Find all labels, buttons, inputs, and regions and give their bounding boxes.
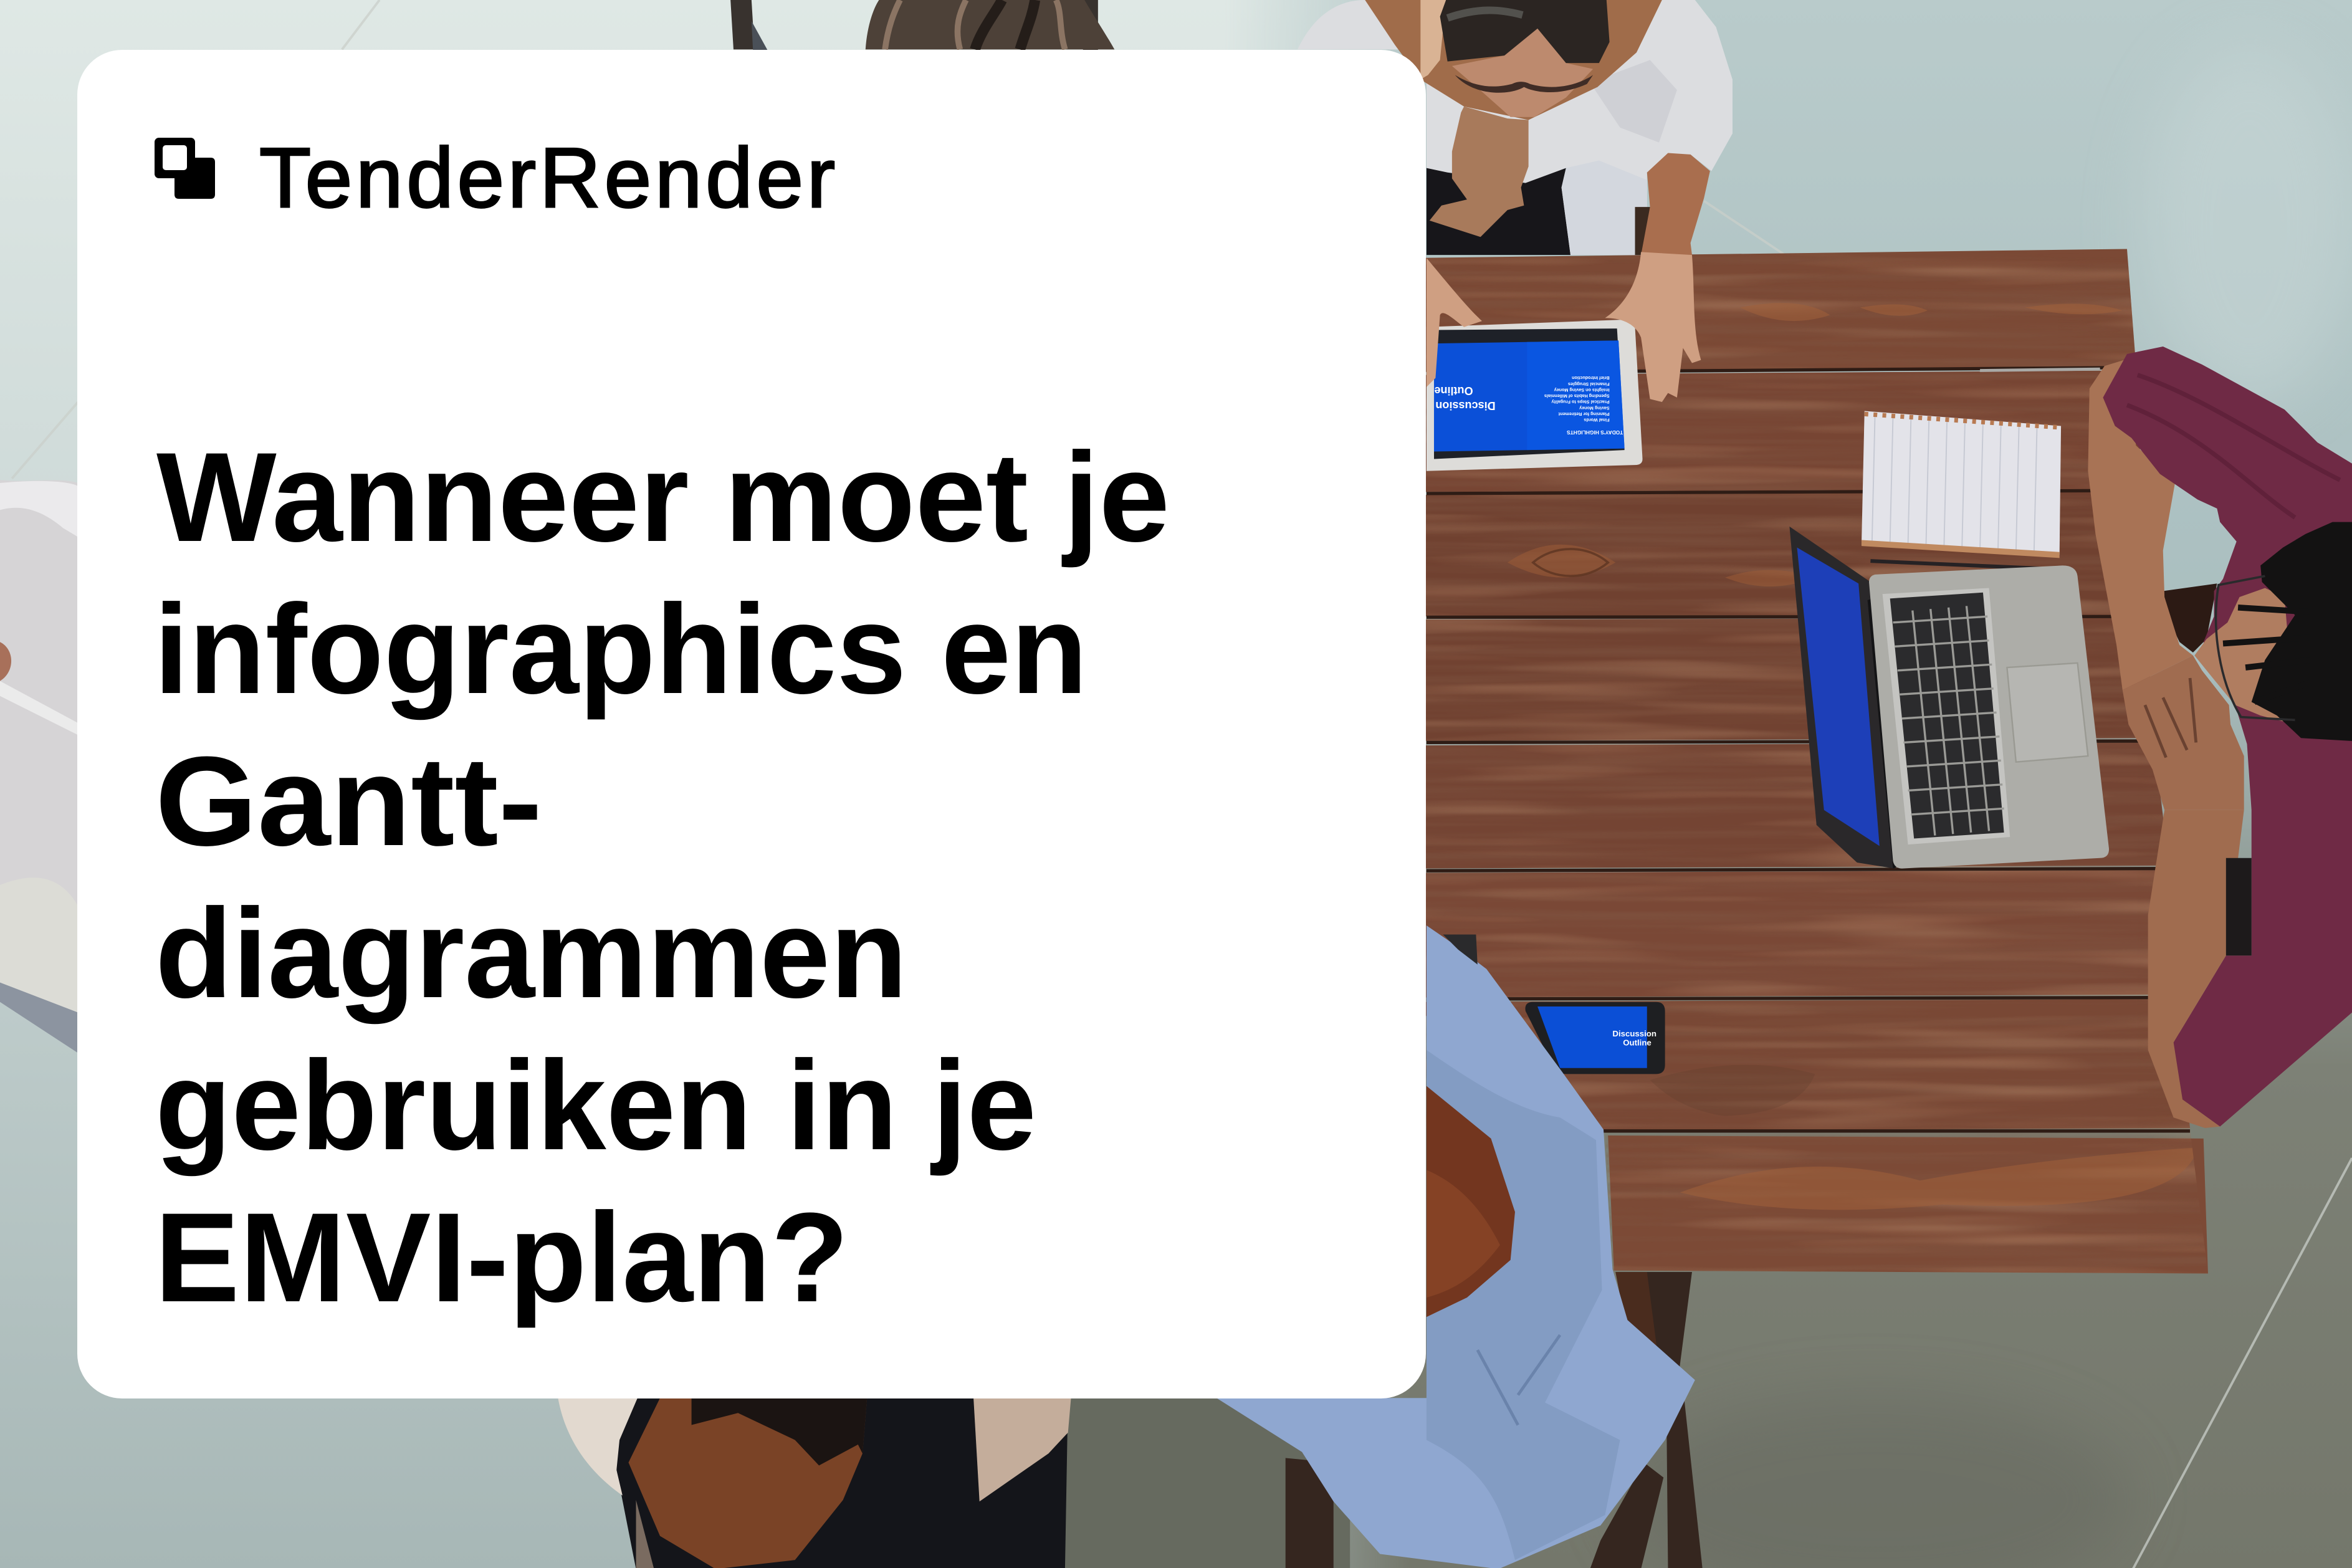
chair legs top bbox=[730, 0, 1098, 51]
glasses frame bbox=[2216, 576, 2295, 720]
trousers bbox=[1427, 168, 1570, 255]
main heading: infographics en bbox=[154, 578, 1088, 720]
tablet screen text, upside down: Outline bbox=[1434, 385, 1473, 397]
tablet screen text, upside down: Final Words bbox=[1584, 418, 1610, 423]
logo wordmark: TenderRender bbox=[259, 130, 835, 225]
main heading: EMVI-plan? bbox=[155, 1187, 849, 1329]
face bbox=[2194, 588, 2295, 725]
phone screen text: Outline bbox=[1623, 1038, 1652, 1048]
dreadlocks bbox=[2223, 522, 2352, 741]
person at right: maroon shirt bbox=[2088, 347, 2352, 1128]
main heading: Wanneer moet je bbox=[156, 426, 1170, 568]
trackpad bbox=[2007, 663, 2088, 762]
forearm bbox=[1641, 153, 1710, 255]
sleeve and torso bbox=[2103, 347, 2352, 1127]
tablet screen text, upside down: TODAY'S HIGHLIGHTS bbox=[1567, 429, 1623, 436]
tablet screen text, upside down: Saving Money bbox=[1579, 405, 1610, 411]
table bbox=[1410, 240, 2220, 1290]
table planks bbox=[1410, 249, 2208, 1273]
tablet screen text, upside down: Discussion bbox=[1435, 399, 1496, 412]
headscarf bbox=[1365, 0, 1662, 120]
tablet screen text, upside down: Insights on Saving Money bbox=[1554, 387, 1610, 393]
tablet bbox=[1427, 320, 1643, 471]
tablet screen text, upside down bbox=[1434, 375, 1623, 436]
person at top centre bbox=[866, 0, 1114, 49]
person at top right: headscarf and white shirt bbox=[1298, 0, 1733, 255]
chair behind person bbox=[2163, 583, 2217, 653]
hands bbox=[2123, 656, 2244, 810]
plank gaps bbox=[1427, 368, 2190, 1131]
shirt tail bbox=[1562, 161, 1647, 255]
person at left: white shirt bbox=[0, 480, 78, 1053]
phone screen text: Discussion bbox=[1612, 1029, 1656, 1038]
hair bbox=[1440, 0, 1610, 63]
curly hair bbox=[628, 1398, 867, 1568]
tablet screen text, upside down: Brief Introduction bbox=[1572, 375, 1610, 381]
main heading: Gantt- bbox=[155, 730, 542, 872]
notebook bbox=[1862, 411, 2061, 568]
tablet screen text, upside down: Spending Habits of Millennials bbox=[1544, 393, 1610, 399]
phone of person bbox=[1443, 934, 1478, 965]
main heading bbox=[154, 426, 1170, 1329]
lower arm bbox=[2148, 810, 2244, 1128]
phone screen text bbox=[1612, 1029, 1656, 1048]
person at bottom left: dark coat and curly hair bbox=[558, 1398, 1071, 1568]
face bbox=[1452, 29, 1593, 117]
hands on tablet bbox=[1427, 252, 1701, 402]
upper arm bbox=[2088, 360, 2193, 690]
shirt bbox=[1298, 0, 1733, 255]
main heading: diagrammen bbox=[155, 882, 907, 1025]
keyboard bbox=[1883, 588, 2010, 844]
logo icon bbox=[155, 138, 215, 199]
person at bottom centre: blue shirt bbox=[1217, 925, 1695, 1568]
scarf knot bbox=[1430, 107, 1529, 237]
tablet screen text, upside down: Planning for Retirement bbox=[1558, 411, 1610, 417]
phone bbox=[1525, 1002, 1665, 1074]
red hair bbox=[1427, 1086, 1515, 1317]
tablet screen text, upside down: Financial Struggles bbox=[1568, 381, 1610, 387]
chair legs bottom bbox=[1286, 1272, 1703, 1568]
main heading: gebruiken in je bbox=[155, 1035, 1036, 1177]
logo bbox=[155, 130, 835, 225]
laptop base bbox=[1869, 565, 2109, 869]
white title card bbox=[77, 50, 1426, 1398]
wood grain bbox=[1410, 240, 2220, 1290]
chair slat bbox=[1635, 207, 1650, 255]
beige coat panels bbox=[558, 1398, 638, 1496]
tablet screen text, upside down: Practical Steps to Frugality bbox=[1552, 399, 1610, 405]
laptop lid bbox=[1789, 527, 1895, 869]
laptop bbox=[1789, 527, 2109, 869]
glasses bbox=[1455, 75, 1593, 93]
